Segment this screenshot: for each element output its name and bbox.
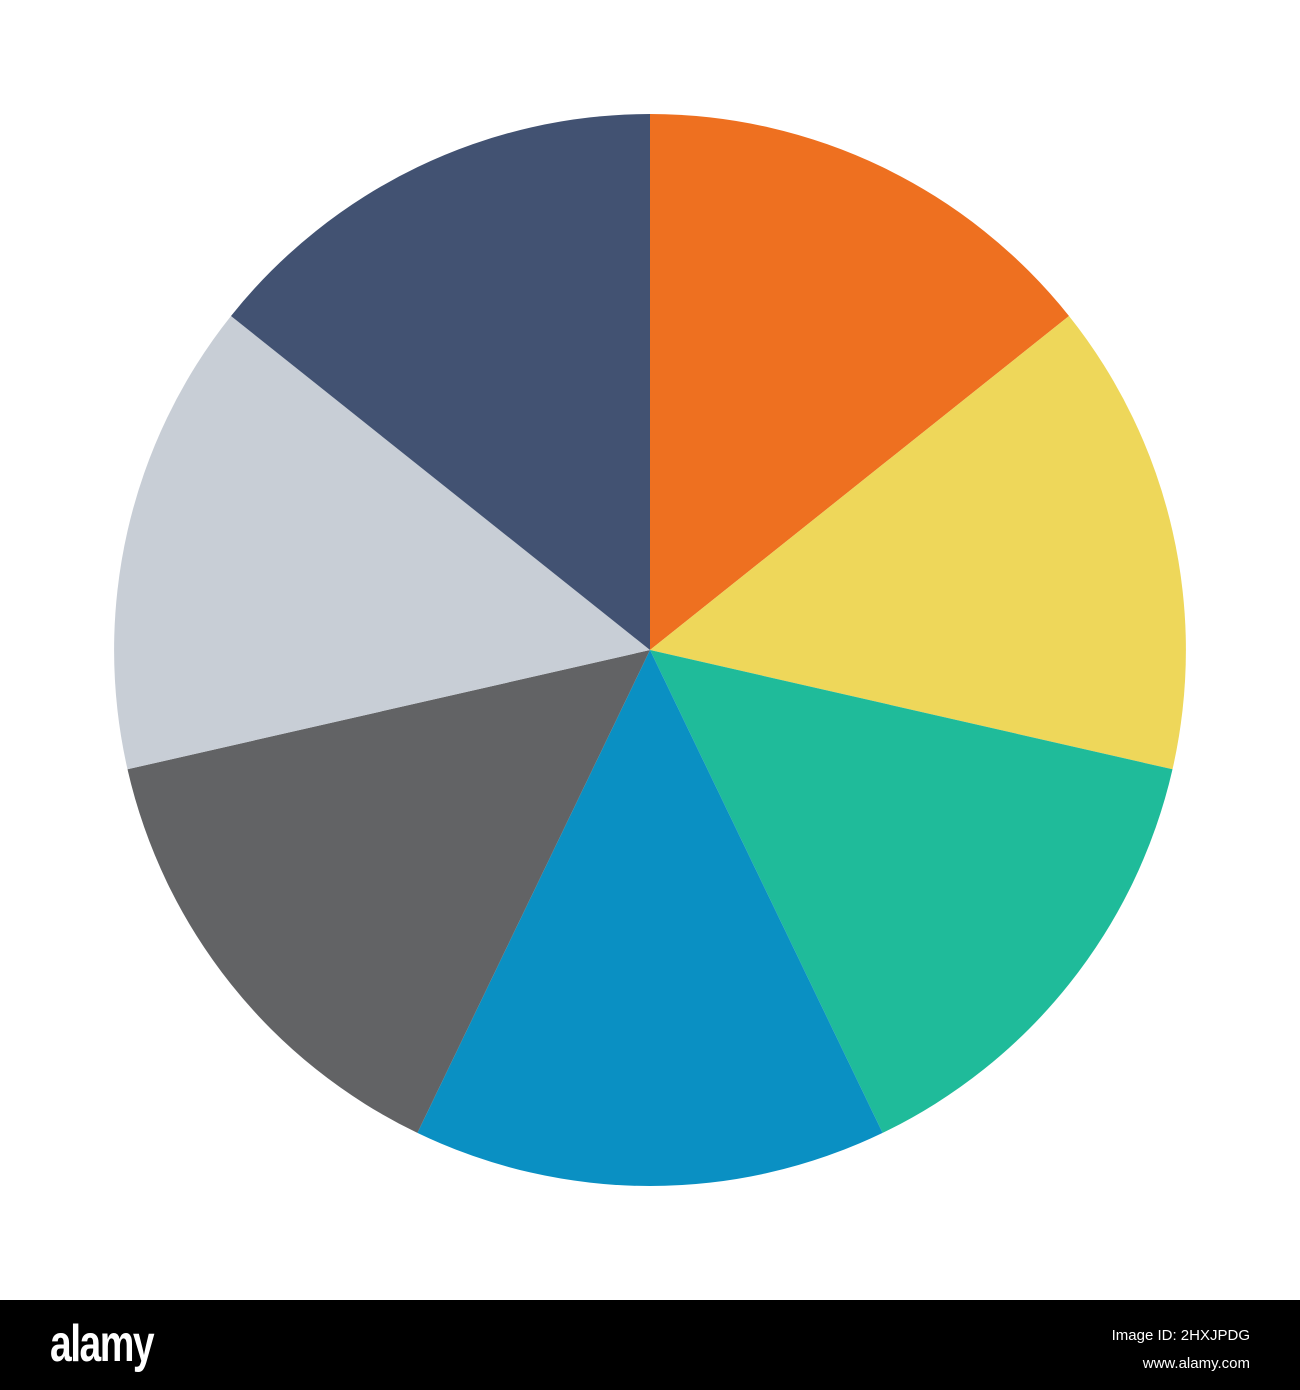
slice: yellow xyxy=(650,316,1186,769)
slice: blue xyxy=(417,650,883,1186)
slice: navy xyxy=(231,114,650,650)
image id text xyxy=(1112,1327,1250,1372)
logo: alamy xyxy=(50,1315,153,1373)
slice: green xyxy=(650,650,1172,1133)
image id text: www.alamy.com xyxy=(1143,1355,1250,1372)
image id text: Image ID: 2HXJPDG xyxy=(1112,1327,1250,1344)
footer bar xyxy=(0,1300,1300,1390)
slice: light gray xyxy=(114,316,650,769)
slice: orange xyxy=(650,114,1069,650)
slice: dark gray xyxy=(128,650,650,1133)
